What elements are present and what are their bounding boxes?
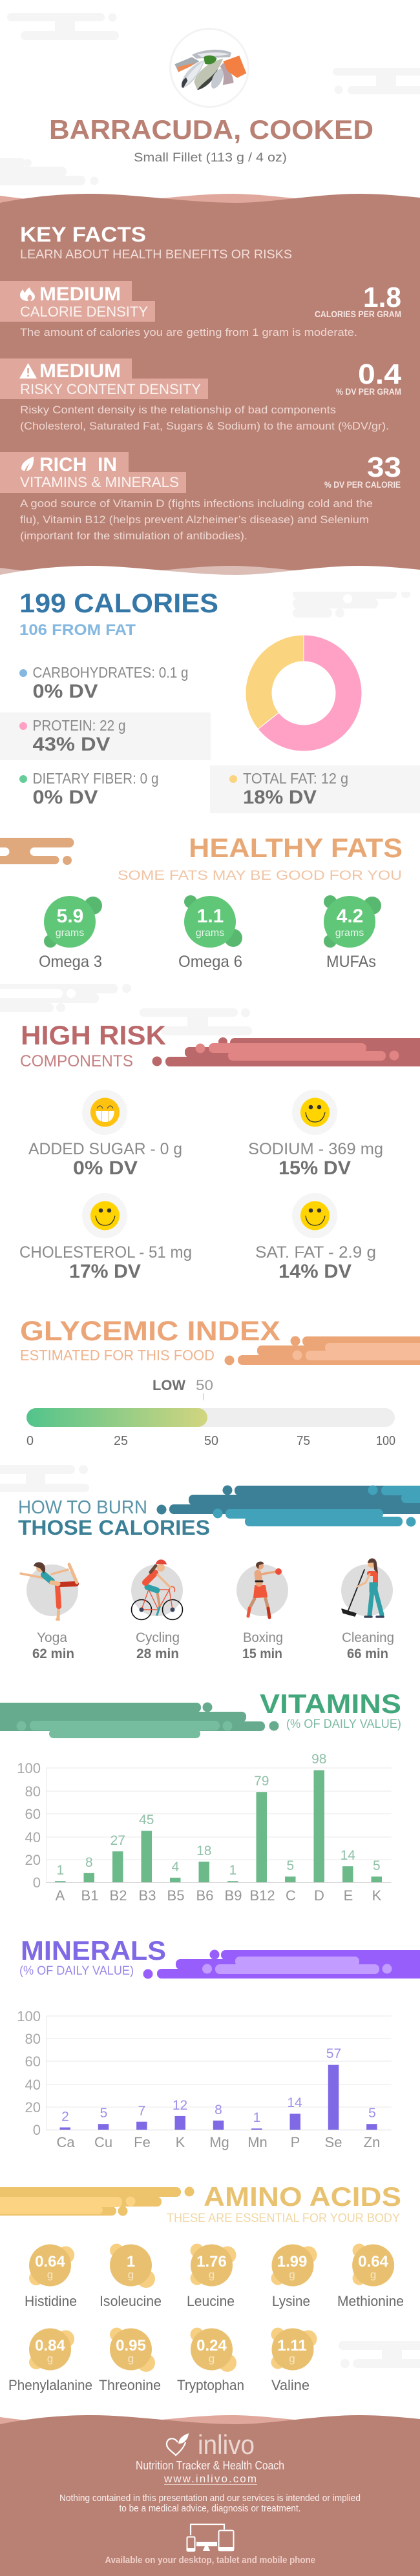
amino: phenylalanine xyxy=(8,2328,92,2393)
availability note: Available on your desktop, tablet and mobile phone xyxy=(105,2555,315,2566)
amino: lysine: 1.99 xyxy=(277,2253,307,2270)
amino: threonine: Threonine xyxy=(99,2377,161,2393)
heading: high risk: HIGH RISK xyxy=(21,1020,166,1050)
amino: tryptophan: g xyxy=(209,2353,215,2365)
disclaimer: Nothing contained in this presentation and our services is intended or implied xyxy=(59,2493,361,2504)
label: medium: MEDIUM xyxy=(39,360,121,382)
stat: mufas: MUFAs xyxy=(326,953,376,971)
gauge scale: 25 xyxy=(114,1434,128,1448)
figure: boxer xyxy=(248,1562,282,1617)
panel: amino acids xyxy=(0,2181,404,2393)
legend: total fat xyxy=(210,765,420,813)
legend: total fat: 18% DV xyxy=(243,787,317,808)
chart: minerals bar chart: 0 xyxy=(33,2122,41,2138)
amino: valine: g xyxy=(289,2353,295,2365)
logo: inlivo xyxy=(167,2429,255,2460)
legend: carbohydrates: 0% DV xyxy=(32,681,98,702)
value: 33: 33 xyxy=(367,452,401,483)
item: cholesterol: CHOLESTEROL - 51 mg xyxy=(19,1243,192,1262)
description: A good source of Vitamin D (fights infections including cold and the xyxy=(20,497,373,510)
chart: vitamins bar chart: 0 xyxy=(33,1875,41,1891)
stat: omega 3: Omega 3 xyxy=(39,953,102,971)
figure: cyclist xyxy=(132,1559,182,1620)
chart: minerals bar chart: Fe xyxy=(134,2134,151,2150)
chart: minerals bar chart: 7 xyxy=(138,2104,145,2119)
amino: leucine: Leucine xyxy=(187,2293,235,2309)
heading: minerals: MINERALS xyxy=(21,1935,166,1966)
panel: calories xyxy=(0,588,420,813)
panel: footer xyxy=(0,2415,420,2576)
description: Risky Content density is the relationship of bad components xyxy=(20,404,336,416)
panel: healthy fats xyxy=(0,833,403,971)
heading: key facts: KEY FACTS xyxy=(20,223,146,246)
chart: minerals bar chart: 80 xyxy=(25,2031,41,2047)
heading: glycemic index: GLYCEMIC INDEX xyxy=(20,1316,280,1347)
chart: vitamins bar chart: B5 xyxy=(167,1887,184,1904)
amino: tryptophan xyxy=(177,2328,244,2393)
amino: leucine: 1.76 xyxy=(196,2253,227,2270)
title: BARRACUDA, COOKED xyxy=(49,114,373,145)
icon: leaf xyxy=(21,457,34,471)
item: sodium: 15% DV xyxy=(278,1158,351,1179)
unit: % DV PER GRAM xyxy=(336,387,401,397)
activity: yoga: 62 min xyxy=(32,1646,74,1661)
chart: minerals bar chart: 20 xyxy=(25,2099,41,2115)
panel: key facts xyxy=(0,194,420,592)
description xyxy=(20,497,373,542)
item: saturated fat xyxy=(255,1193,376,1282)
ribbon xyxy=(225,1336,420,1366)
item: sodium: SODIUM - 369 mg xyxy=(248,1140,383,1158)
chart: vitamins bar chart: 18 xyxy=(196,1844,211,1858)
chart: vitamins bar chart: 1 xyxy=(56,1863,64,1878)
legend: protein: 43% DV xyxy=(32,734,110,755)
amino: leucine: g xyxy=(209,2269,215,2281)
amino: histidine: Histidine xyxy=(25,2293,77,2309)
item: saturated fat: 14% DV xyxy=(278,1261,352,1282)
activity: cycling: 28 min xyxy=(136,1646,179,1661)
chart: minerals bar chart: Zn xyxy=(364,2134,380,2150)
legend: carbohydrates: CARBOHYDRATES: 0.1 g xyxy=(32,664,189,681)
legend: protein: PROTEIN: 22 g xyxy=(32,717,125,734)
icon: devices xyxy=(187,2524,234,2551)
ribbon xyxy=(0,838,74,865)
activity: cleaning: 66 min xyxy=(347,1646,388,1661)
activity: cleaning: Cleaning xyxy=(342,1630,394,1645)
subheading: components: COMPONENTS xyxy=(20,1052,133,1070)
chart: vitamins bar chart: 98 xyxy=(311,1752,326,1767)
amino: histidine: g xyxy=(47,2269,53,2281)
legend: carbohydrates xyxy=(19,664,189,702)
stat: mufas xyxy=(324,895,381,971)
activity: yoga: Yoga xyxy=(37,1630,67,1645)
icon: smiling face xyxy=(90,1201,120,1230)
ribbon xyxy=(0,1703,279,1738)
subheading: (% OF DAILY VALUE) xyxy=(286,1718,401,1731)
image: assorted fish in circle xyxy=(171,28,248,107)
chart: minerals bar chart: 5 xyxy=(100,2106,107,2121)
amino: histidine xyxy=(25,2244,77,2309)
amino: threonine xyxy=(99,2328,161,2393)
chart: minerals bar chart: 5 xyxy=(368,2106,376,2121)
card: rich in vitamins and minerals xyxy=(0,452,401,542)
chart: vitamins bar chart: 20 xyxy=(25,1852,41,1868)
chart: vitamins bar chart: B6 xyxy=(196,1887,213,1904)
chart: vitamins bar chart xyxy=(17,1752,392,1904)
chart: vitamins bar chart: 4 xyxy=(171,1860,179,1875)
amino: methionine: 0.64 xyxy=(358,2253,389,2270)
item: added sugar: 0% DV xyxy=(73,1158,138,1179)
disclaimer xyxy=(59,2493,361,2514)
disclaimer: to be a medical advice, diagnosis or treatment. xyxy=(119,2504,301,2514)
heading: 199 calories: 199 CALORIES xyxy=(19,588,218,618)
amino: isoleucine: g xyxy=(128,2269,134,2281)
amino: phenylalanine: g xyxy=(47,2353,53,2365)
icon: grinning face xyxy=(90,1098,120,1127)
stat: omega 3: 5.9 xyxy=(57,906,83,927)
unit: % DV PER CALORIE xyxy=(324,480,401,490)
value: 1.8: 1.8 xyxy=(363,282,401,313)
chart: minerals bar chart: 1 xyxy=(253,2110,260,2125)
icon: smiling face xyxy=(300,1098,330,1127)
chart: minerals bar chart: K xyxy=(176,2134,185,2150)
chart: minerals bar chart: Mg xyxy=(209,2134,229,2150)
chart: vitamins bar chart: 14 xyxy=(341,1848,355,1863)
gauge scale xyxy=(26,1434,395,1448)
chart: vitamins bar chart: K xyxy=(372,1887,382,1904)
card: risky content density xyxy=(0,358,402,432)
chart: vitamins bar chart: E xyxy=(344,1887,353,1904)
chart: vitamins bar chart: 45 xyxy=(139,1813,154,1827)
icon: smiling face xyxy=(300,1201,330,1230)
activity: boxing: Boxing xyxy=(243,1630,283,1645)
chart: vitamins bar chart: B9 xyxy=(225,1887,242,1904)
chart: minerals bar chart: Ca xyxy=(56,2134,75,2150)
chart: vitamins bar chart: B3 xyxy=(139,1887,156,1904)
activity: yoga xyxy=(21,1562,78,1661)
stat: omega 6 xyxy=(178,895,242,971)
ribbon xyxy=(143,1949,420,1979)
gauge scale: 0 xyxy=(26,1434,34,1448)
amino: lysine xyxy=(271,2244,317,2309)
activity: cycling: Cycling xyxy=(136,1630,180,1645)
description: The amount of calories you are getting from 1 gram is moderate. xyxy=(20,326,357,338)
chart: vitamins bar chart: D xyxy=(314,1887,324,1904)
figure: yoga pose xyxy=(21,1562,77,1619)
description: flu), Vitamin B12 (helps prevent Alzheimer’s disease) and Selenium xyxy=(20,514,369,526)
stat: omega 3: grams xyxy=(56,928,84,939)
subheading: SOME FATS MAY BE GOOD FOR YOU xyxy=(118,868,402,883)
activity: cycling xyxy=(131,1559,183,1661)
amino: threonine: 0.95 xyxy=(116,2337,146,2354)
label: rich in: RICH IN xyxy=(39,454,117,475)
legend: dietary fiber: 0% DV xyxy=(32,787,98,808)
legend: dietary fiber: DIETARY FIBER: 0 g xyxy=(32,770,159,787)
gauge scale: 75 xyxy=(297,1434,310,1448)
chart: minerals bar chart: 12 xyxy=(173,2098,187,2113)
gauge label: low 50: 50 xyxy=(196,1377,213,1393)
stat: omega 6: grams xyxy=(196,928,224,939)
panel: vitamins xyxy=(0,1688,401,1904)
panel: glycemic index xyxy=(20,1316,420,1448)
panel: high risk components xyxy=(19,1020,420,1282)
ribbon xyxy=(152,1037,420,1066)
value: 0.4: 0.4 xyxy=(358,358,402,390)
chart: minerals bar chart: 100 xyxy=(17,2008,41,2024)
heading: healthy fats: HEALTHY FATS xyxy=(189,833,403,863)
subheading: LEARN ABOUT HEALTH BENEFITS OR RISKS xyxy=(20,248,292,262)
item: saturated fat: SAT. FAT - 2.9 g xyxy=(255,1243,376,1262)
amino: phenylalanine: 0.84 xyxy=(35,2337,66,2354)
gauge label: low 50 xyxy=(152,1377,213,1400)
stat: mufas: grams xyxy=(335,928,364,939)
icon: warning triangle xyxy=(19,363,37,379)
amino: tryptophan: 0.24 xyxy=(196,2337,227,2354)
legend: dietary fiber xyxy=(19,770,159,808)
amino: isoleucine: Isoleucine xyxy=(100,2293,162,2309)
heading: amino acids: AMINO ACIDS xyxy=(204,2181,401,2212)
chart: minerals bar chart: 60 xyxy=(25,2053,41,2070)
ribbon xyxy=(156,1486,420,1527)
item: cholesterol: 17% DV xyxy=(69,1261,141,1282)
chart: vitamins bar chart: 100 xyxy=(17,1760,41,1776)
item: added sugar: ADDED SUGAR - 0 g xyxy=(28,1140,182,1158)
chart: vitamins bar chart: 5 xyxy=(286,1858,294,1873)
chart: minerals bar chart: 57 xyxy=(326,2046,341,2061)
chart: vitamins bar chart: B2 xyxy=(110,1887,127,1904)
header xyxy=(49,28,373,145)
amino: isoleucine: 1 xyxy=(127,2253,135,2270)
amino: isoleucine xyxy=(100,2244,162,2309)
chart: vitamins bar chart: 40 xyxy=(25,1829,41,1845)
ribbon xyxy=(0,2187,194,2216)
chart: minerals bar chart: 2 xyxy=(61,2110,69,2124)
chart: vitamins bar chart: 80 xyxy=(25,1783,41,1800)
label: medium: MEDIUM xyxy=(39,284,121,305)
figure: person sweeping xyxy=(342,1558,383,1617)
card: calorie density xyxy=(0,281,401,338)
gauge bar xyxy=(26,1408,395,1427)
chart: minerals bar chart: P xyxy=(291,2134,300,2150)
amino: lysine: g xyxy=(289,2269,295,2281)
label: calorie density: CALORIE DENSITY xyxy=(20,304,148,320)
amino: valine: Valine xyxy=(271,2377,310,2393)
amino: methionine: Methionine xyxy=(337,2293,404,2309)
stat: omega 6: Omega 6 xyxy=(178,953,242,971)
subheading: (% OF DAILY VALUE) xyxy=(19,1964,134,1978)
chart: minerals bar chart: 40 xyxy=(25,2077,41,2093)
stat: omega 3 xyxy=(39,896,102,971)
logo: inlivo: inlivo xyxy=(198,2429,255,2460)
label: risky content density: RISKY CONTENT DENSITY xyxy=(20,381,201,397)
legend: protein xyxy=(0,712,211,760)
serving size: Small Fillet (113 g / 4 oz) xyxy=(134,151,287,165)
heading: those calories: THOSE CALORIES xyxy=(18,1516,210,1539)
subheading: 106 from fat: 106 FROM FAT xyxy=(19,621,136,639)
chart: minerals bar chart: 8 xyxy=(215,2103,222,2117)
subheading: ESTIMATED FOR THIS FOOD xyxy=(20,1347,215,1364)
heading: vitamins: VITAMINS xyxy=(260,1688,401,1719)
stat: omega 6: 1.1 xyxy=(197,906,224,927)
gauge scale: 100 xyxy=(376,1434,395,1448)
icon: flame xyxy=(20,287,35,301)
item: sodium xyxy=(248,1090,383,1179)
chart: minerals bar chart: Mn xyxy=(247,2134,268,2150)
amino: methionine xyxy=(337,2244,404,2309)
amino: valine: 1.11 xyxy=(277,2337,307,2354)
item: cholesterol xyxy=(19,1193,192,1282)
description: (important for the stimulation of antibodies). xyxy=(20,530,247,542)
amino: leucine xyxy=(187,2244,236,2309)
tagline: Nutrition Tracker & Health Coach xyxy=(136,2459,284,2472)
amino: lysine: Lysine xyxy=(272,2293,310,2309)
gauge scale: 50 xyxy=(204,1434,218,1448)
description: (Cholesterol, Saturated Fat, Sugars & Sodium) to the amount (%DV/gr). xyxy=(20,420,389,432)
chart: minerals bar chart: Cu xyxy=(94,2134,112,2150)
legend: total fat: TOTAL FAT: 12 g xyxy=(243,770,348,787)
chart: vitamins bar chart: 79 xyxy=(254,1774,269,1789)
activity: boxing xyxy=(236,1562,288,1661)
chart: vitamins bar chart: 1 xyxy=(229,1863,236,1878)
website link: www.inlivo.com xyxy=(163,2473,257,2485)
chart: vitamins bar chart: B1 xyxy=(81,1887,98,1904)
subheading: THESE ARE ESSENTIAL FOR YOUR BODY xyxy=(167,2211,400,2225)
chart: minerals bar chart: 14 xyxy=(287,2095,302,2110)
unit: CALORIES PER GRAM xyxy=(315,309,401,319)
chart: minerals bar chart: Se xyxy=(325,2134,342,2150)
panel: minerals xyxy=(17,1935,420,2150)
chart: minerals bar chart xyxy=(17,2008,392,2150)
activity: boxing: 15 min xyxy=(242,1646,282,1661)
chart: vitamins bar chart: 8 xyxy=(85,1855,93,1870)
chart: vitamins bar chart: 60 xyxy=(25,1806,41,1822)
amino: valine xyxy=(271,2328,317,2393)
item: added sugar xyxy=(28,1090,182,1179)
panel: how to burn calories xyxy=(18,1486,420,1661)
chart: vitamins bar chart: 27 xyxy=(110,1833,125,1848)
description xyxy=(20,404,389,432)
chart: vitamins bar chart: B12 xyxy=(249,1887,275,1904)
gauge label: low 50: LOW xyxy=(152,1377,185,1393)
chart: vitamins bar chart: C xyxy=(286,1887,296,1904)
label: vitamins and minerals: VITAMINS & MINERALS xyxy=(20,474,179,490)
chart: calorie donut xyxy=(246,635,362,751)
activity: cleaning xyxy=(341,1558,394,1661)
amino: histidine: 0.64 xyxy=(35,2253,66,2270)
amino: phenylalanine: Phenylalanine xyxy=(8,2377,92,2393)
amino: tryptophan: Tryptophan xyxy=(177,2377,244,2393)
amino: methionine: g xyxy=(370,2269,376,2281)
stat: mufas: 4.2 xyxy=(337,906,363,927)
chart: vitamins bar chart: 5 xyxy=(373,1858,381,1873)
chart: vitamins bar chart: A xyxy=(56,1887,65,1904)
amino: threonine: g xyxy=(128,2353,134,2365)
heading: how to burn: HOW TO BURN xyxy=(18,1497,147,1518)
